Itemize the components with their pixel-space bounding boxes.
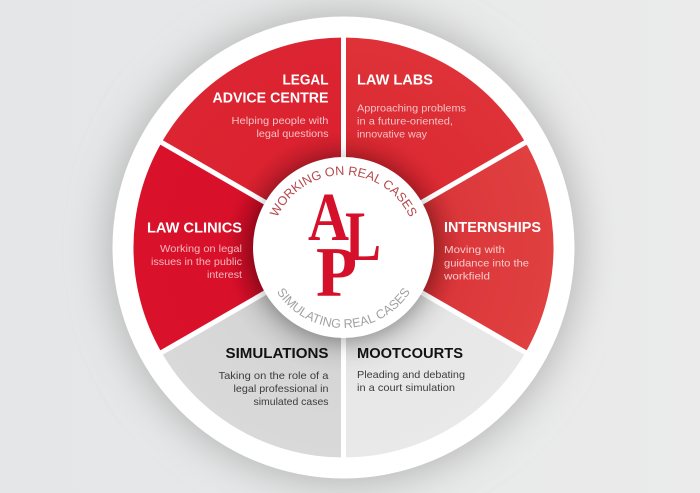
wheel shadow	[108, 13, 578, 483]
legal advice centre text: LEGAL	[282, 72, 329, 88]
law labs text	[357, 72, 466, 140]
segment: legal advice centre	[162, 38, 344, 248]
segment wheel	[133, 38, 554, 458]
segment: law clinics	[133, 142, 344, 352]
ALP logo: P	[316, 234, 357, 312]
ALP logo: L	[345, 198, 381, 276]
internships text: guidance into the	[444, 258, 529, 270]
segment: internships	[344, 142, 554, 352]
wheel: white ring	[112, 16, 574, 478]
simulations text	[218, 346, 329, 408]
law clinics text: LAW CLINICS	[147, 220, 242, 236]
internships text: Moving with	[444, 244, 505, 256]
mootcourts text: Pleading and debating	[357, 369, 465, 381]
ALP logo: A	[308, 179, 349, 255]
curved label: working on real cases: WORKING ON REAL CASES	[269, 166, 416, 216]
law labs text: innovative way	[357, 128, 428, 140]
simulations text: simulated cases	[254, 396, 328, 408]
internships text	[443, 220, 541, 282]
legal advice centre text: ADVICE CENTRE	[212, 90, 329, 106]
law labs text: LAW LABS	[357, 72, 433, 88]
segment: simulations	[162, 248, 344, 458]
law clinics text	[147, 220, 242, 281]
segment: mootcourts	[344, 248, 525, 458]
center circle	[253, 157, 434, 338]
law labs text: Approaching problems	[357, 102, 466, 114]
ALP logo	[308, 179, 381, 312]
simulations text: legal professional in	[234, 383, 329, 395]
internships text: INTERNSHIPS	[444, 220, 541, 236]
law clinics text: issues in the public	[151, 256, 242, 268]
law labs text: in a future-oriented,	[357, 116, 453, 128]
mootcourts text: in a court simulation	[357, 382, 455, 394]
law clinics text: Working on legal	[160, 243, 242, 255]
center circle shadow	[252, 158, 436, 342]
legal advice centre text	[212, 72, 329, 140]
mootcourts text	[357, 346, 465, 394]
internships text: workfield	[443, 270, 490, 282]
simulations text: Taking on the role of a	[218, 370, 329, 382]
curved label: simulating real cases: SIMULATING REAL CASES	[278, 288, 410, 328]
legal advice centre text: legal questions	[256, 128, 328, 140]
simulations text: SIMULATIONS	[226, 346, 329, 362]
legal advice centre text: Helping people with	[232, 115, 329, 127]
mootcourts text: MOOTCOURTS	[357, 346, 463, 362]
segment: law labs	[344, 38, 525, 248]
law clinics text: interest	[207, 269, 242, 281]
